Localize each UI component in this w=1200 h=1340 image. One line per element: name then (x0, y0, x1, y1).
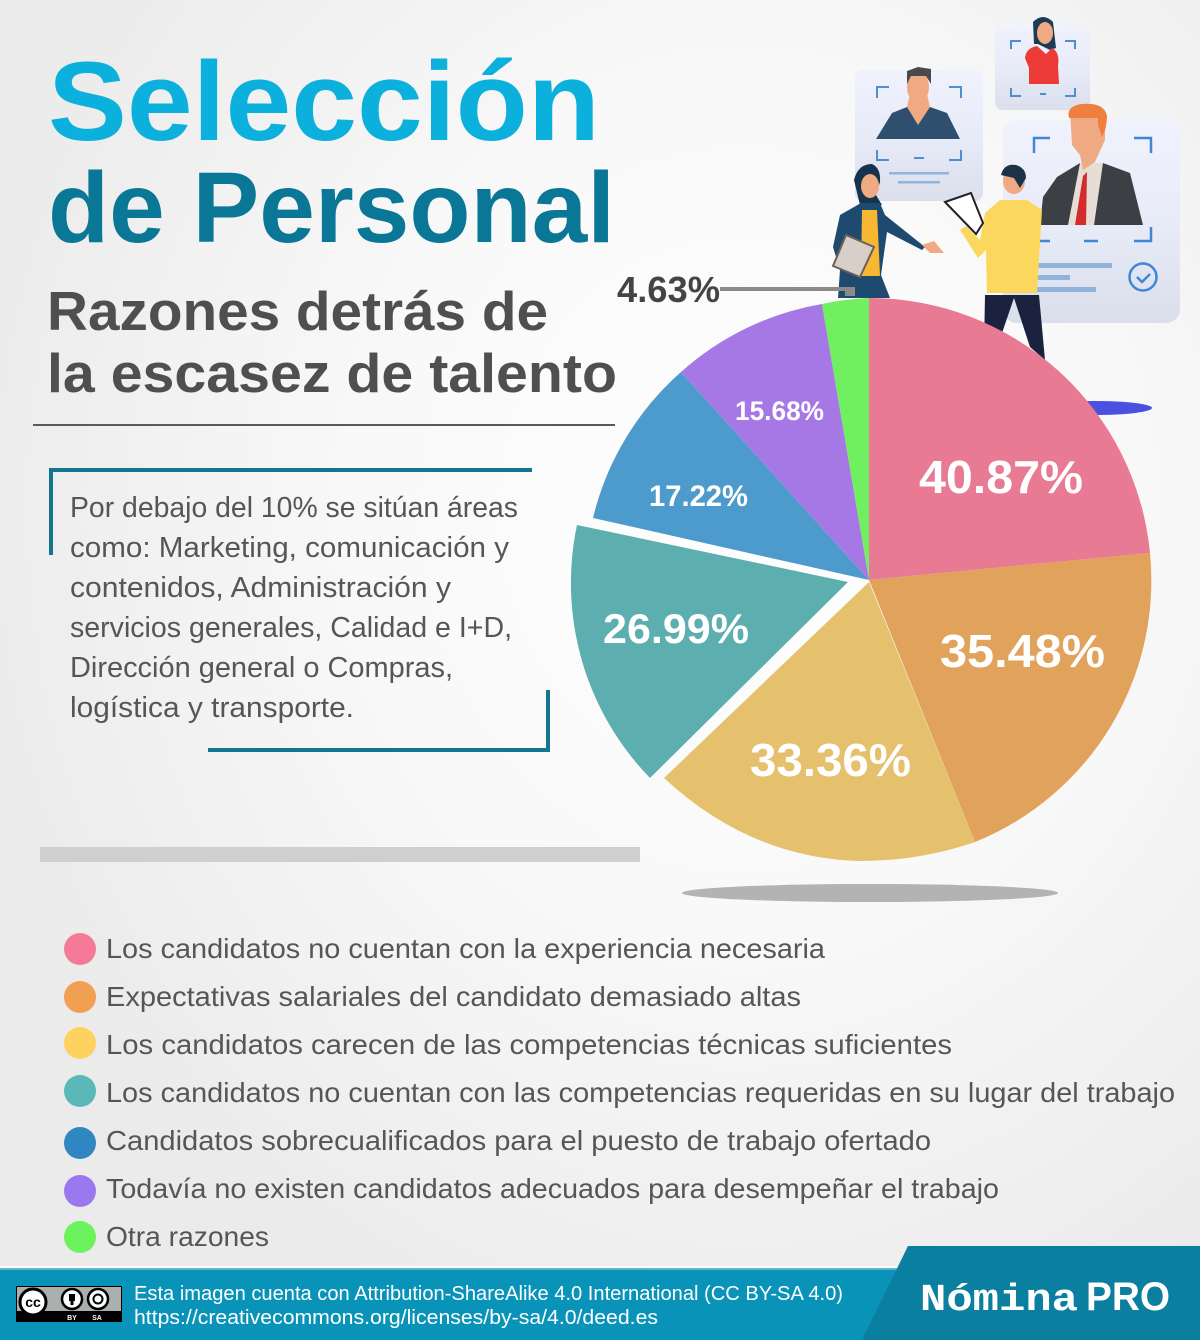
callout: 4.63% label with leader line: 4.63% (617, 269, 720, 310)
legend item: workplace skills: Los candidatos no cuentan con las competencias requeridas en su lugar del trabajo (106, 1077, 1175, 1108)
icon: creative commons badge: BY (67, 1315, 77, 1322)
slice: 33.36% (664, 582, 975, 861)
text block: callout: Dirección general o Compras, (70, 652, 453, 684)
logo panel (862, 1246, 1200, 1340)
pie value labels: 33.36% (750, 734, 911, 786)
subtitle (47, 280, 617, 404)
icon: woman presenting (833, 164, 944, 298)
icon: candidate card suited man (1003, 104, 1180, 323)
slice: 40.87% (869, 298, 1150, 580)
title (48, 39, 615, 264)
icon: creative commons badge (16, 1286, 122, 1322)
slice: 4.63% (822, 298, 869, 580)
license text: Esta imagen cuenta con Attribution-ShareAlike 4.0 International (CC BY-SA 4.0) (134, 1283, 843, 1305)
pie value labels (603, 396, 1105, 786)
legend item: other: Otra razones (106, 1221, 269, 1252)
legend item: salary: Expectativas salariales del candidato demasiado altas (106, 981, 801, 1012)
icon: candidate card man (855, 67, 983, 201)
icon: creative commons badge: cc (25, 1294, 41, 1310)
icon: candidate profile cards illustration (833, 17, 1180, 415)
title: de Personal (48, 152, 615, 264)
legend item: no suitable candidates: Todavía no existen candidatos adecuados para desempeñar el trabajo (106, 1173, 999, 1204)
text block: callout (51, 470, 548, 750)
text block: callout: como: Marketing, comunicación y (70, 532, 510, 564)
subtitle: la escasez de talento (47, 342, 617, 404)
icon: creative commons badge: SA (92, 1315, 102, 1322)
license text (134, 1283, 843, 1329)
subtitle: Razones detrás de (47, 280, 548, 342)
slice: 35.48% (869, 553, 1151, 842)
legend item: technical skills: Los candidatos carecen de las competencias técnicas suficientes (106, 1029, 952, 1060)
icon: man with tablet (945, 165, 1045, 360)
pie value labels: 15.68% (735, 396, 824, 426)
pie value labels: 35.48% (940, 625, 1105, 677)
license text: https://creativecommons.org/licenses/by-sa/4.0/deed.es (134, 1307, 658, 1329)
text block: callout: Por debajo del 10% se sitúan áreas (70, 492, 518, 524)
pie value labels: 17.22% (649, 480, 748, 513)
logo panel: Nómina (920, 1279, 1078, 1322)
slice: 17.22% (593, 372, 869, 580)
slice: 26.99% (571, 525, 848, 778)
text block: callout: contenidos, Administración y (70, 572, 452, 604)
title: Selección (48, 39, 600, 164)
slice: 15.68% (681, 304, 869, 580)
pie value labels: 26.99% (603, 605, 749, 652)
logo panel: PRO (1086, 1275, 1170, 1319)
pie chart (571, 298, 1151, 861)
legend item: overqualified: Candidatos sobrecualificados para el puesto de trabajo ofertado (106, 1125, 931, 1156)
pie value labels: 40.87% (919, 451, 1083, 503)
footer band (0, 1246, 1200, 1340)
text block: callout: logística y transporte. (70, 692, 354, 724)
icon: candidate card woman (995, 17, 1090, 110)
legend item: experience: Los candidatos no cuentan con la experiencia necesaria (106, 933, 825, 964)
text block: callout: servicios generales, Calidad e I+D, (70, 612, 512, 644)
icon: blue ground shadow (1038, 401, 1152, 415)
icon: pie ground shadow (682, 884, 1058, 902)
callout: 4.63% label with leader line (617, 269, 855, 310)
legend (64, 933, 1175, 1253)
